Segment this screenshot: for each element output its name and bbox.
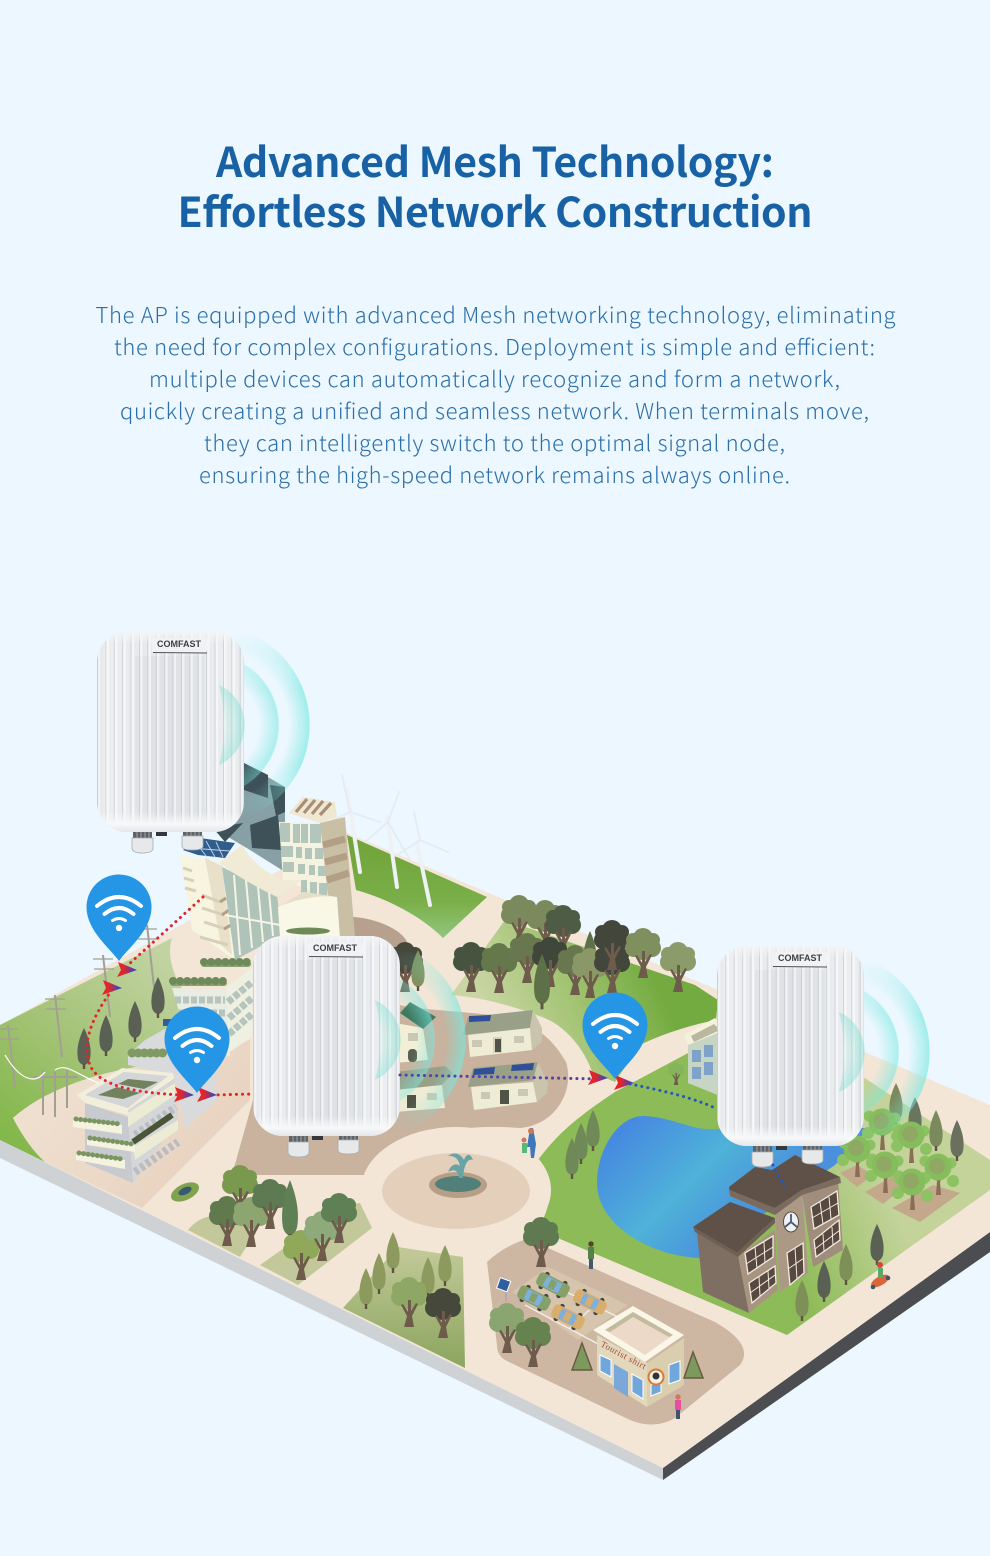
description text block: quickly creating a unified and seamless network. When terminals move, xyxy=(120,394,869,426)
ground surface and roads xyxy=(0,833,990,1468)
box office building behind right AP xyxy=(684,1018,725,1098)
access point: top: COMFAST xyxy=(157,639,202,649)
signal wave inner arc: centre AP xyxy=(375,1000,401,1080)
checkered glass tower xyxy=(213,763,285,872)
description text block: multiple devices can automatically recognize and form a network, xyxy=(149,362,840,394)
title: Effortless Network Construction xyxy=(178,179,812,239)
grey annex and terrace block xyxy=(73,1019,217,1183)
signal waves: right AP xyxy=(854,955,930,1149)
wifi pin: left xyxy=(86,874,152,961)
title xyxy=(178,129,812,239)
roaming route: red dotted section xyxy=(87,897,252,1095)
signal wave inner arc: right AP xyxy=(839,1012,865,1092)
description text block: the need for complex configurations. Deployment is simple and efficient: xyxy=(114,330,875,362)
signal wave inner arc: top AP xyxy=(219,685,245,765)
lawns and plazas xyxy=(0,835,990,1425)
access point: centre xyxy=(253,936,400,1157)
description text block: ensuring the high-speed network remains always online. xyxy=(199,458,790,490)
access point: centre: COMFAST xyxy=(313,943,358,953)
utility poles and power lines xyxy=(0,925,158,1117)
tree groves xyxy=(77,895,964,1367)
description text block: they can intelligently switch to the optimal signal node, xyxy=(204,426,785,458)
fountain xyxy=(429,1153,487,1198)
people, car and scooter xyxy=(168,1128,891,1419)
orchard garden xyxy=(837,1108,960,1222)
houses near central plaza xyxy=(395,1002,548,1112)
title: Advanced Mesh Technology: xyxy=(215,129,774,189)
board side faces xyxy=(0,1140,990,1480)
description text block: The AP is equipped with advanced Mesh networking technology, eliminating xyxy=(96,298,896,330)
wifi pin: right xyxy=(582,992,648,1079)
access point: top xyxy=(97,632,244,853)
brown school building with clock xyxy=(693,1155,843,1313)
mid-rise green terrace building xyxy=(172,962,253,1057)
description text block xyxy=(96,298,896,490)
parking lot with cars and sign xyxy=(497,1269,620,1345)
main office building with solar roof xyxy=(180,838,340,960)
access point: right: COMFAST xyxy=(778,953,822,963)
signal waves: top AP xyxy=(234,628,310,822)
isometric campus map xyxy=(0,763,990,1480)
signal waves: centre AP xyxy=(390,943,466,1137)
shop building: Tourist shirt xyxy=(599,1339,648,1371)
wifi pin: lower left xyxy=(164,1006,230,1093)
access point: right xyxy=(717,946,864,1167)
wind turbines xyxy=(322,775,448,905)
route arrowheads xyxy=(102,962,634,1102)
roaming route: blue dotted section xyxy=(630,1084,787,1192)
roaming route: purple dotted section xyxy=(400,1075,600,1079)
beige office tower xyxy=(279,797,355,937)
shop building xyxy=(572,1306,703,1407)
